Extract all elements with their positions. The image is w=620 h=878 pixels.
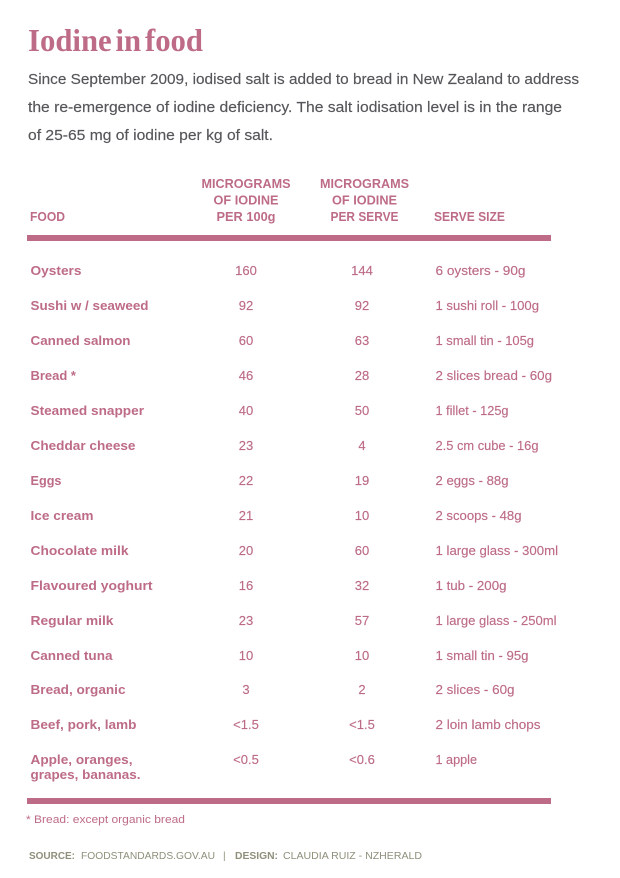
table header: PER 100g [216,210,276,224]
row: fruit [30,752,477,782]
row: regular milk [30,613,557,628]
row: chocolate milk: Chocolate milk [30,543,129,558]
row: eggs: 19 [355,473,369,488]
row: canned salmon: 63 [355,333,369,348]
row: canned salmon [30,333,534,348]
row: bread [30,368,552,383]
table header: MICROGRAMS [320,177,409,191]
row: ice cream: 2 scoops - 48g [436,508,522,523]
row: cheddar cheese: 23 [239,438,253,453]
row: sushi: 92 [355,298,369,313]
table header: OF IODINE [332,194,397,208]
row: regular milk: Regular milk [30,613,114,628]
source and design credit: DESIGN: [235,851,278,862]
table rows [30,263,558,782]
row: flavoured yoghurt: 32 [355,578,369,593]
row: steamed snapper: 50 [355,403,369,418]
row: bread, organic: Bread, organic [30,682,126,697]
table header: PER SERVE [330,210,398,224]
row: ice cream: Ice cream [30,508,94,523]
row: ice cream [30,508,522,523]
row: fruit: Apple, oranges, [30,752,132,767]
intro text: the re-emergence of iodine deficiency. The salt iodisation level is in the range [28,100,562,116]
row: oysters: 6 oysters - 90g [436,263,526,278]
row: fruit: <0.6 [349,752,375,767]
table header: MICROGRAMS [202,177,290,191]
source and design credit: CLAUDIA RUIZ - NZHERALD [283,851,422,862]
row: canned salmon: Canned salmon [30,333,131,348]
row: bread: 28 [355,368,369,383]
row: canned salmon: 60 [239,333,253,348]
row: fruit: <0.5 [233,752,259,767]
row: bread, organic: 2 slices - 60g [436,682,514,697]
row: steamed snapper [30,403,508,418]
row: canned tuna: Canned tuna [30,648,113,663]
row: steamed snapper: Steamed snapper [30,403,144,418]
row: canned tuna [30,648,528,663]
row: chocolate milk: 1 large glass - 300ml [436,543,558,558]
row: oysters [30,263,526,278]
row: ice cream: 21 [239,508,253,523]
row: cheddar cheese: 2.5 cm cube - 16g [436,438,538,453]
intro text: of 25-65 mg of iodine per kg of salt. [28,128,273,144]
row: sushi: Sushi w / seaweed [30,298,149,313]
row: ice cream: 10 [355,508,369,523]
row: canned tuna: 10 [239,648,253,663]
source and design credit [29,851,422,862]
row: canned tuna: 10 [355,648,369,663]
intro text [28,72,579,144]
row: meat: 2 loin lamb chops [436,717,541,732]
row: flavoured yoghurt: 16 [239,578,253,593]
row: sushi: 92 [239,298,253,313]
row: fruit: 1 apple [436,752,477,767]
source and design credit: SOURCE: [29,851,75,862]
row: sushi [30,298,539,313]
row: flavoured yoghurt: Flavoured yoghurt [30,578,153,593]
row: regular milk: 23 [239,613,253,628]
table header: FOOD [30,210,65,224]
row: meat: <1.5 [233,717,259,732]
row: chocolate milk: 60 [355,543,369,558]
row: eggs: 2 eggs - 88g [436,473,508,488]
table header: SERVE SIZE [434,210,505,224]
row: flavoured yoghurt: 1 tub - 200g [436,578,506,593]
row: canned salmon: 1 small tin - 105g [436,333,534,348]
row: bread: 2 slices bread - 60g [436,368,552,383]
row: eggs [30,473,508,488]
table header: OF IODINE [214,194,278,208]
row: steamed snapper: 40 [239,403,253,418]
row: bread, organic: 3 [242,682,250,697]
row: oysters: Oysters [30,263,82,278]
intro text: Since September 2009, iodised salt is added to bread in New Zealand to address [28,72,579,88]
row: oysters: 144 [351,263,373,278]
row: regular milk: 57 [355,613,369,628]
row: oysters: 160 [235,263,257,278]
row: meat: Beef, pork, lamb [30,717,137,732]
row: canned tuna: 1 small tin - 95g [436,648,528,663]
row: eggs: Eggs [30,473,62,488]
row: bread: Bread * [30,368,77,383]
row: eggs: 22 [239,473,253,488]
row: regular milk: 1 large glass - 250ml [436,613,557,628]
row: bread, organic [30,682,514,697]
row: flavoured yoghurt [30,578,506,593]
title: Iodine in food [28,22,203,58]
row: bread: 46 [239,368,253,383]
row: chocolate milk: 20 [239,543,253,558]
footer rule [27,798,551,804]
source and design credit: | [223,851,226,862]
row: sushi: 1 sushi roll - 100g [436,298,539,313]
footnote: * Bread: except organic bread [26,814,185,826]
row: cheddar cheese: Cheddar cheese [30,438,136,453]
table header [30,177,505,224]
row: meat [30,717,541,732]
row: bread, organic: 2 [358,682,366,697]
row: cheddar cheese: 4 [358,438,366,453]
source and design credit: FOODSTANDARDS.GOV.AU [81,851,215,862]
row: steamed snapper: 1 fillet - 125g [436,403,508,418]
row: meat: <1.5 [349,717,375,732]
row: cheddar cheese [30,438,538,453]
row: chocolate milk [30,543,558,558]
header rule [27,235,551,241]
row: fruit: grapes, bananas. [30,767,140,782]
